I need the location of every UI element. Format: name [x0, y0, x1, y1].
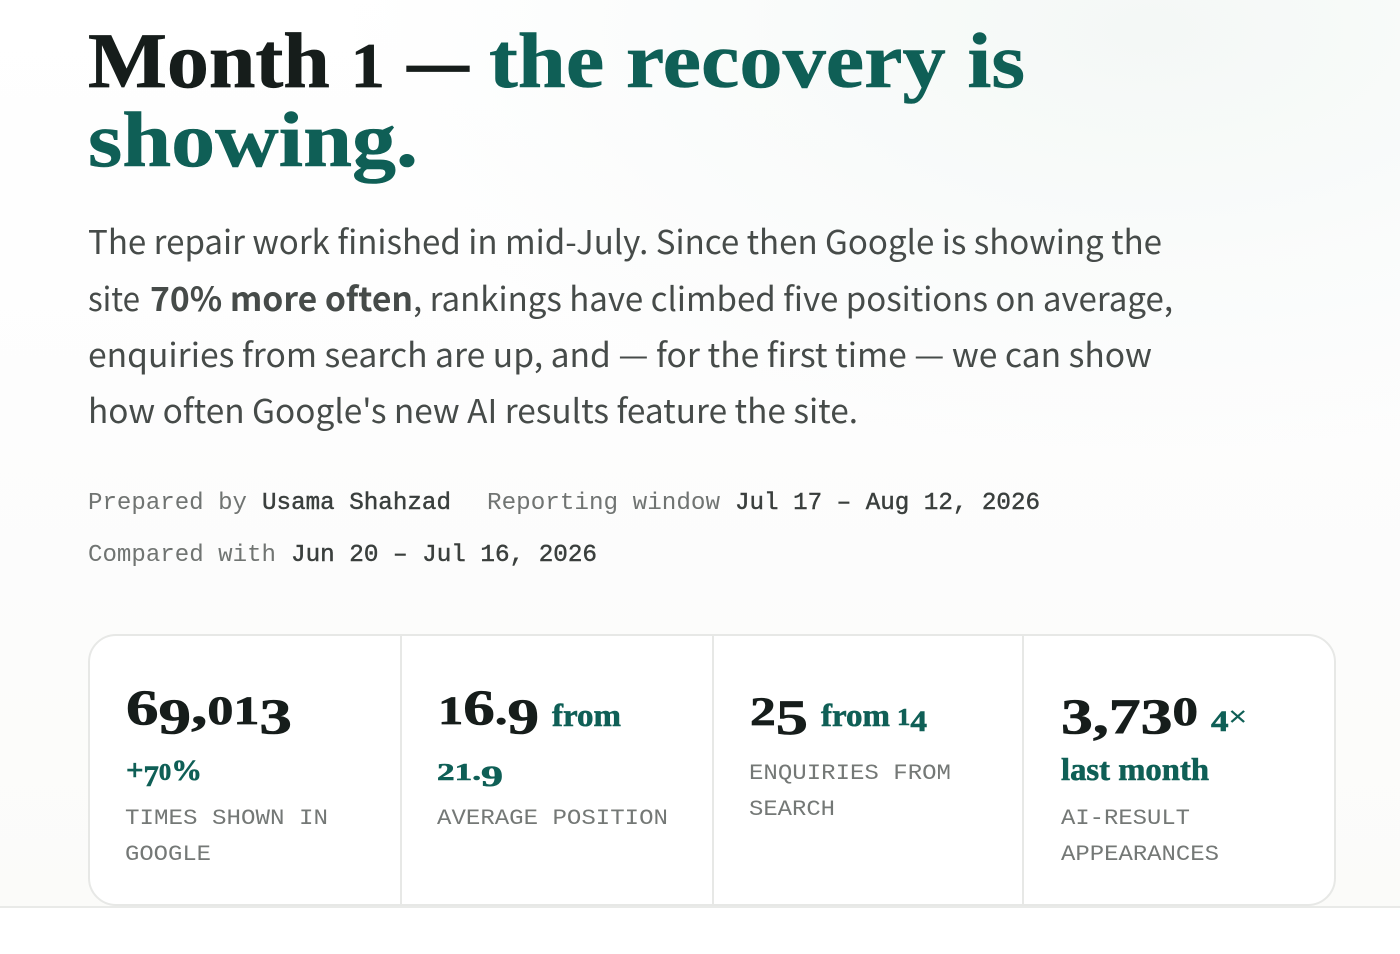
footer rule — [0, 906, 1400, 908]
stat: times shown — [125, 679, 328, 867]
stat: AI-result appearances — [1061, 688, 1247, 867]
stat: average position: 21. — [437, 760, 467, 786]
stat: times shown: 9 — [159, 688, 191, 744]
report metadata: Jun 20 – Jul 16, 2026 — [291, 542, 597, 569]
stat: enquiries: 2 — [750, 689, 770, 734]
intro paragraph: The repair work finished in mid-July. Since then Google is showing the — [88, 216, 1162, 264]
title: Month 1 — [88, 17, 385, 104]
stat: AI-result appearances: APPEARANCES — [1061, 842, 1219, 867]
report metadata — [88, 490, 1040, 569]
intro paragraph: , rankings have climbed five positions on average, — [413, 273, 1173, 321]
stat: AI-result appearances: 0 — [1173, 689, 1198, 734]
stat: enquiries: from — [821, 697, 890, 733]
stat: enquiries: ENQUIRIES FROM — [749, 761, 951, 786]
stat: times shown: 0 — [159, 760, 171, 786]
intro paragraph: site — [88, 273, 140, 321]
stat: times shown: GOOGLE — [125, 842, 211, 867]
stat: AI-result appearances: × — [1229, 702, 1247, 733]
stat: times shown: 7 — [144, 760, 159, 793]
title: the recovery is — [489, 17, 1025, 104]
stat: times shown: % — [171, 754, 201, 787]
intro paragraph: 70% more often — [150, 273, 413, 321]
report metadata: Reporting window — [487, 490, 721, 517]
stat: AI-result appearances: 4 — [1211, 705, 1226, 738]
intro paragraph: enquiries from search are up, and — for the first time — we can show — [88, 329, 1152, 377]
stat: average position: AVERAGE POSITION — [437, 806, 668, 831]
intro paragraph: how often Google's new AI results feature the site. — [88, 385, 858, 433]
stat: average position: 16. — [438, 679, 505, 735]
report metadata: Prepared by — [88, 490, 247, 517]
report metadata: Jul 17 – Aug 12, 2026 — [735, 490, 1040, 517]
stat: times shown: 01 — [207, 688, 259, 733]
stat: enquiries: SEARCH — [749, 797, 835, 822]
stat: average position: from — [552, 697, 621, 733]
stat: AI-result appearances: AI-RESULT — [1061, 806, 1190, 831]
title — [88, 17, 1025, 183]
stat: average position: 9 — [507, 688, 539, 744]
title: — — [406, 17, 470, 104]
stat: AI-result appearances: last month — [1061, 751, 1209, 787]
stat: enquiries: 4 — [910, 705, 927, 738]
stat: enquiries — [749, 689, 951, 822]
report metadata: Usama Shahzad — [262, 490, 451, 517]
stat: times shown: TIMES SHOWN IN — [125, 806, 328, 831]
intro paragraph — [88, 216, 1173, 433]
stat: times shown: , — [191, 679, 207, 735]
stat: times shown: 3 — [259, 688, 292, 744]
stat: AI-result appearances: 3,73 — [1061, 688, 1159, 744]
stat: average position: 9 — [481, 760, 503, 793]
stat: times shown: + — [126, 754, 143, 787]
report metadata: Compared with — [88, 542, 276, 569]
stat: enquiries: 1 — [897, 705, 909, 731]
stat: average position — [437, 679, 668, 831]
panel: stats card — [89, 635, 1335, 905]
stat: enquiries: 5 — [776, 689, 808, 745]
stat: times shown: 6 — [126, 679, 151, 735]
title: showing. — [88, 96, 418, 183]
